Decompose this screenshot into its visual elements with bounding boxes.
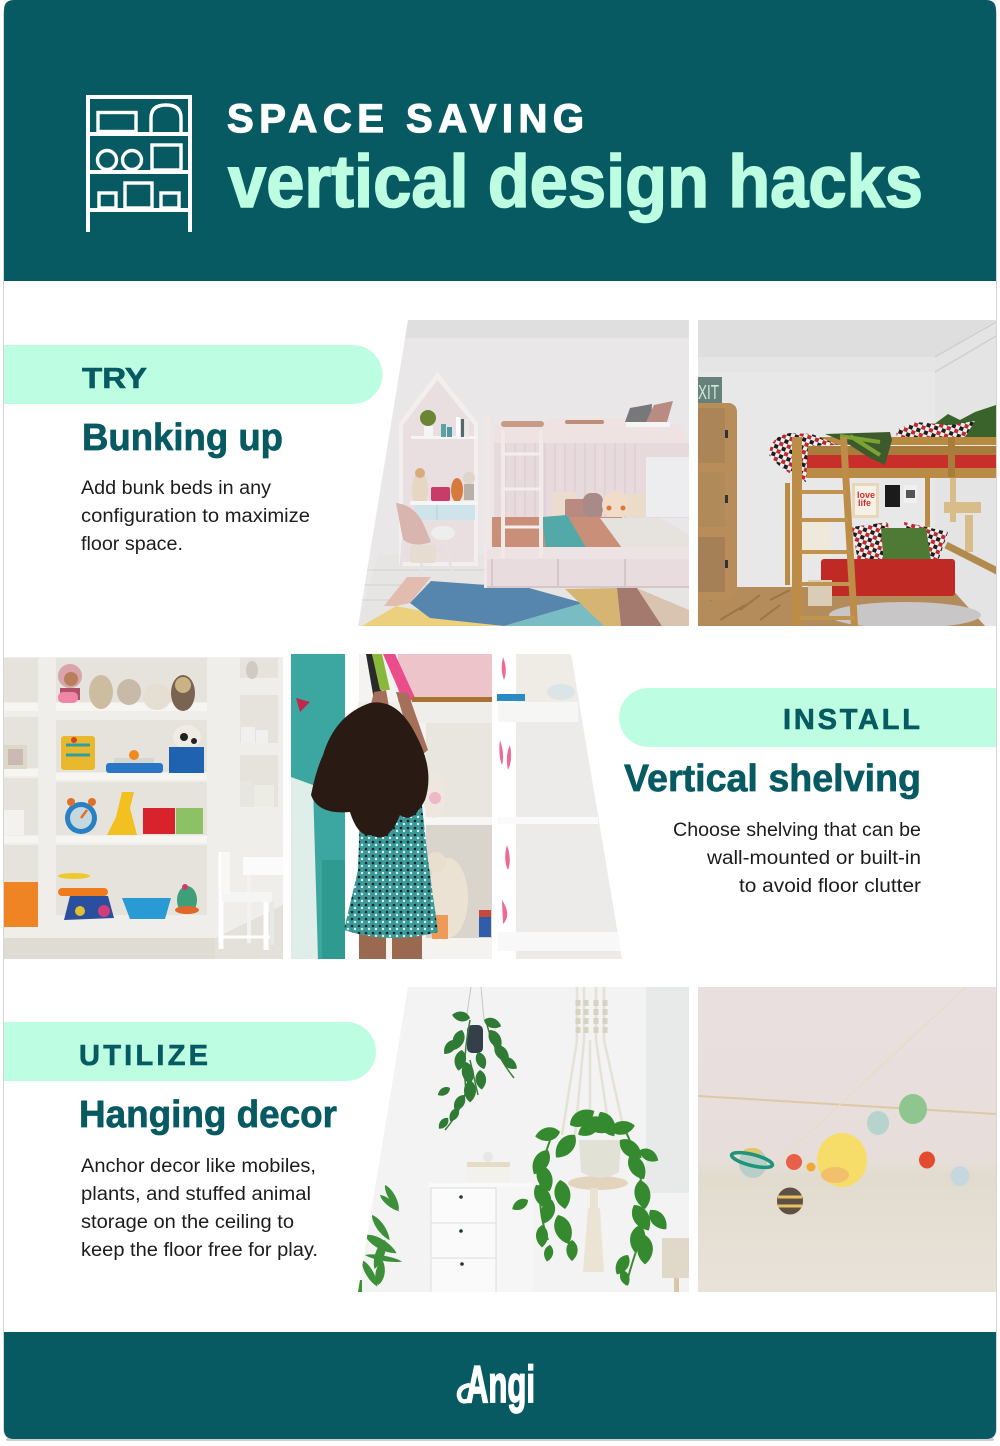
label: utilize: UTILIZE [79, 1040, 208, 1072]
body: bunking up [81, 478, 310, 555]
pill: utilize [4, 1022, 376, 1081]
photo: planet mobile [698, 987, 996, 1292]
eyebrow: space saving: SPACE SAVING [227, 97, 584, 141]
photo: pink bunk bed room [358, 320, 690, 626]
header band [4, 0, 996, 281]
books and small items [366, 654, 575, 924]
planets [730, 1094, 970, 1214]
third shelf toys [65, 792, 203, 835]
heading: vertical shelving: Vertical shelving [624, 758, 921, 800]
dresser [430, 1152, 510, 1292]
exit sign [698, 377, 722, 404]
plush toys and cup [424, 792, 491, 939]
title: vertical design hacks: vertical design hacks [228, 140, 923, 223]
panel: hanging decor text [4, 1022, 376, 1261]
wall posters and tiles [852, 478, 981, 552]
wall posters and tiles: life [858, 498, 871, 508]
body: hanging decor: plants, and stuffed animal [81, 1184, 311, 1205]
wall posters and tiles: love [857, 490, 875, 500]
heading: bunking up: Bunking up [82, 417, 283, 459]
photo: hanging plants [358, 987, 690, 1294]
exit sign: XIT [698, 382, 719, 404]
shelving backs [358, 654, 622, 959]
body: hanging decor: storage on the ceiling to [81, 1212, 294, 1233]
macrame planter [562, 987, 628, 1272]
bunk bed [487, 401, 690, 588]
pill: install [619, 688, 996, 747]
logo: angi [459, 1356, 535, 1414]
top shelf toys [58, 664, 195, 711]
body: vertical shelving: wall-mounted or built-in [706, 848, 921, 869]
shelf niches [4, 658, 278, 927]
body: bunking up: Add bunk beds in any [81, 478, 272, 499]
sofa and pillows [785, 477, 999, 628]
icon: shelving unit [88, 97, 190, 232]
body: hanging decor: keep the floor free for play. [81, 1240, 318, 1261]
pill: try [4, 345, 382, 404]
side shelf decor [4, 661, 274, 835]
body: bunking up: configuration to maximize [81, 506, 310, 527]
body: bunking up: floor space. [81, 534, 183, 555]
logo: angi: Angi [466, 1356, 535, 1414]
chair [396, 503, 455, 574]
body: vertical shelving: Choose shelving that can be [673, 820, 921, 841]
body: vertical shelving: to avoid floor clutter [739, 876, 922, 897]
body: vertical shelving [673, 820, 922, 897]
rug [362, 577, 689, 626]
white chair and table [221, 852, 283, 950]
panel: bunking up text [4, 345, 382, 555]
label: try: TRY [82, 363, 147, 395]
house shelf [399, 372, 478, 566]
palm plant [358, 1183, 403, 1292]
trailing ivy [510, 1105, 671, 1287]
body: hanging decor [81, 1156, 318, 1261]
bottom shelf toys [4, 873, 199, 927]
panel: vertical shelving text [619, 688, 996, 897]
photo: wooden loft bed [698, 320, 999, 628]
girl [311, 690, 438, 959]
body: hanging decor: Anchor decor like mobiles, [81, 1156, 316, 1177]
wardrobe [698, 403, 737, 600]
hanging plant [436, 987, 520, 1131]
heading: hanging decor: Hanging decor [79, 1094, 337, 1136]
label: install: INSTALL [783, 704, 920, 736]
photo: toy shelves [4, 657, 283, 959]
photo: girl reaching shelf [291, 654, 622, 959]
loft bed [769, 405, 996, 627]
footer band [4, 1332, 996, 1439]
second shelf toys [61, 725, 204, 773]
